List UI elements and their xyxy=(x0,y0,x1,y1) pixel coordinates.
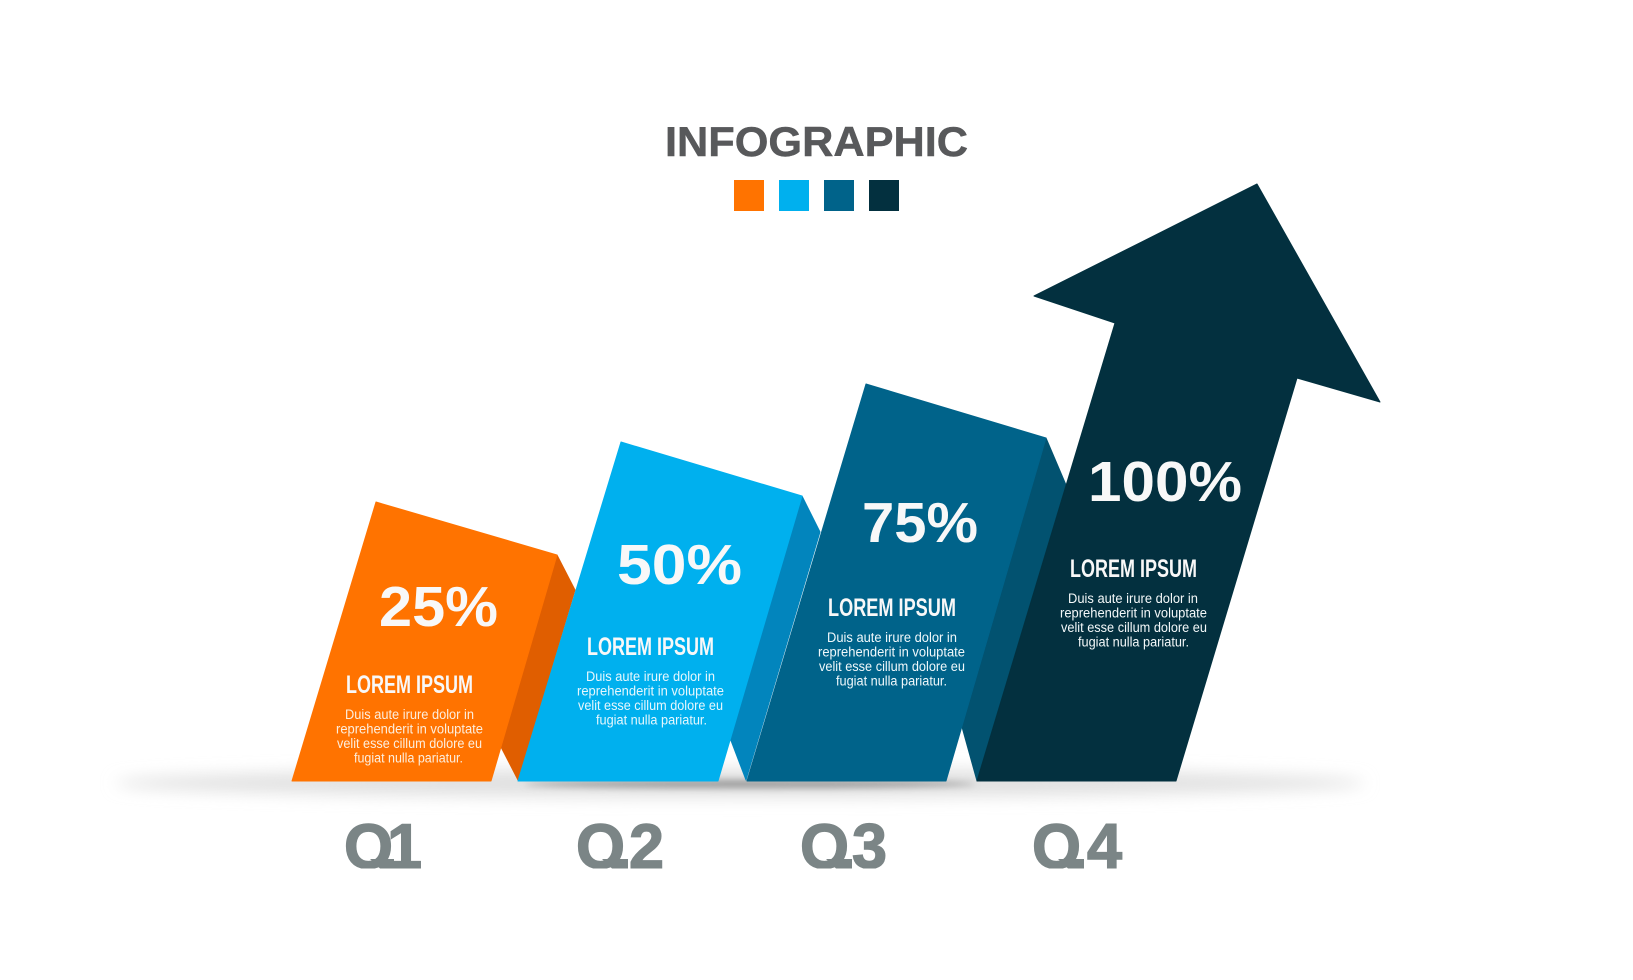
Q3 percentage: 75% xyxy=(862,491,978,555)
Q2 body text xyxy=(577,669,724,728)
Q2 block side face xyxy=(730,496,820,780)
label Q2: Q2 xyxy=(576,812,664,882)
Q1 percentage: 25% xyxy=(379,575,498,639)
Q4 body text: Duis aute irure dolor in xyxy=(1068,591,1198,606)
Q1 body text: velit esse cillum dolore eu xyxy=(337,736,482,751)
Q3 body text: Duis aute irure dolor in xyxy=(827,630,957,645)
Q4 body text: velit esse cillum dolore eu xyxy=(1061,620,1207,635)
label Q4: Q4 xyxy=(1032,812,1122,882)
Q2 body text: fugiat nulla pariatur. xyxy=(596,712,707,728)
Q3 body text: reprehenderit in voluptate xyxy=(818,644,965,660)
label Q2 xyxy=(578,823,662,868)
label Q3 xyxy=(802,822,886,868)
Q4 body text: reprehenderit in voluptate xyxy=(1060,606,1207,620)
Q4 body text: fugiat nulla pariatur. xyxy=(1078,634,1189,650)
Q2 body text: Duis aute irure dolor in xyxy=(586,669,715,684)
Q1 body text xyxy=(336,707,483,766)
Q3 block front face xyxy=(747,384,1046,781)
Q4 heading: LOREM IPSUM xyxy=(1070,555,1197,583)
Q3 block side face xyxy=(962,438,1066,781)
Q1 body text: reprehenderit in voluptate xyxy=(336,722,483,736)
panel: Q1 orange block xyxy=(292,502,575,781)
Q1 block front face xyxy=(292,502,557,781)
Q2 body text: velit esse cillum dolore eu xyxy=(578,698,723,713)
panel: Q2 light blue block xyxy=(518,442,820,781)
Q3 body text xyxy=(818,630,965,688)
legend colour squares xyxy=(734,180,899,211)
label Q3: Q3 xyxy=(800,812,887,882)
Q3 body text: fugiat nulla pariatur. xyxy=(836,674,947,688)
panel: Q4 dark arrow xyxy=(977,184,1380,781)
label Q1 xyxy=(346,823,421,868)
Q3 heading: LOREM IPSUM xyxy=(828,594,956,622)
Q2 percentage: 50% xyxy=(617,533,742,597)
title: INFOGRAPHIC xyxy=(665,118,968,165)
ground shadow xyxy=(115,769,1365,797)
Q1 heading: LOREM IPSUM xyxy=(346,671,473,699)
Q4 percentage: 100% xyxy=(1088,450,1242,514)
Q2 block front face xyxy=(518,442,802,781)
Q2 body text: reprehenderit in voluptate xyxy=(577,684,724,698)
panel: Q3 mid blue block xyxy=(747,384,1066,781)
Q4 arrow shape xyxy=(977,184,1380,781)
Q1 block side face xyxy=(501,555,575,780)
Q4 body text xyxy=(1060,591,1207,650)
Q3 body text: velit esse cillum dolore eu xyxy=(819,659,965,674)
label Q4 xyxy=(1034,823,1122,868)
Q2 heading: LOREM IPSUM xyxy=(587,633,714,661)
label Q1: Q1 xyxy=(344,812,422,882)
Q1 body text: fugiat nulla pariatur. xyxy=(354,750,463,766)
Q1 body text: Duis aute irure dolor in xyxy=(345,707,474,722)
